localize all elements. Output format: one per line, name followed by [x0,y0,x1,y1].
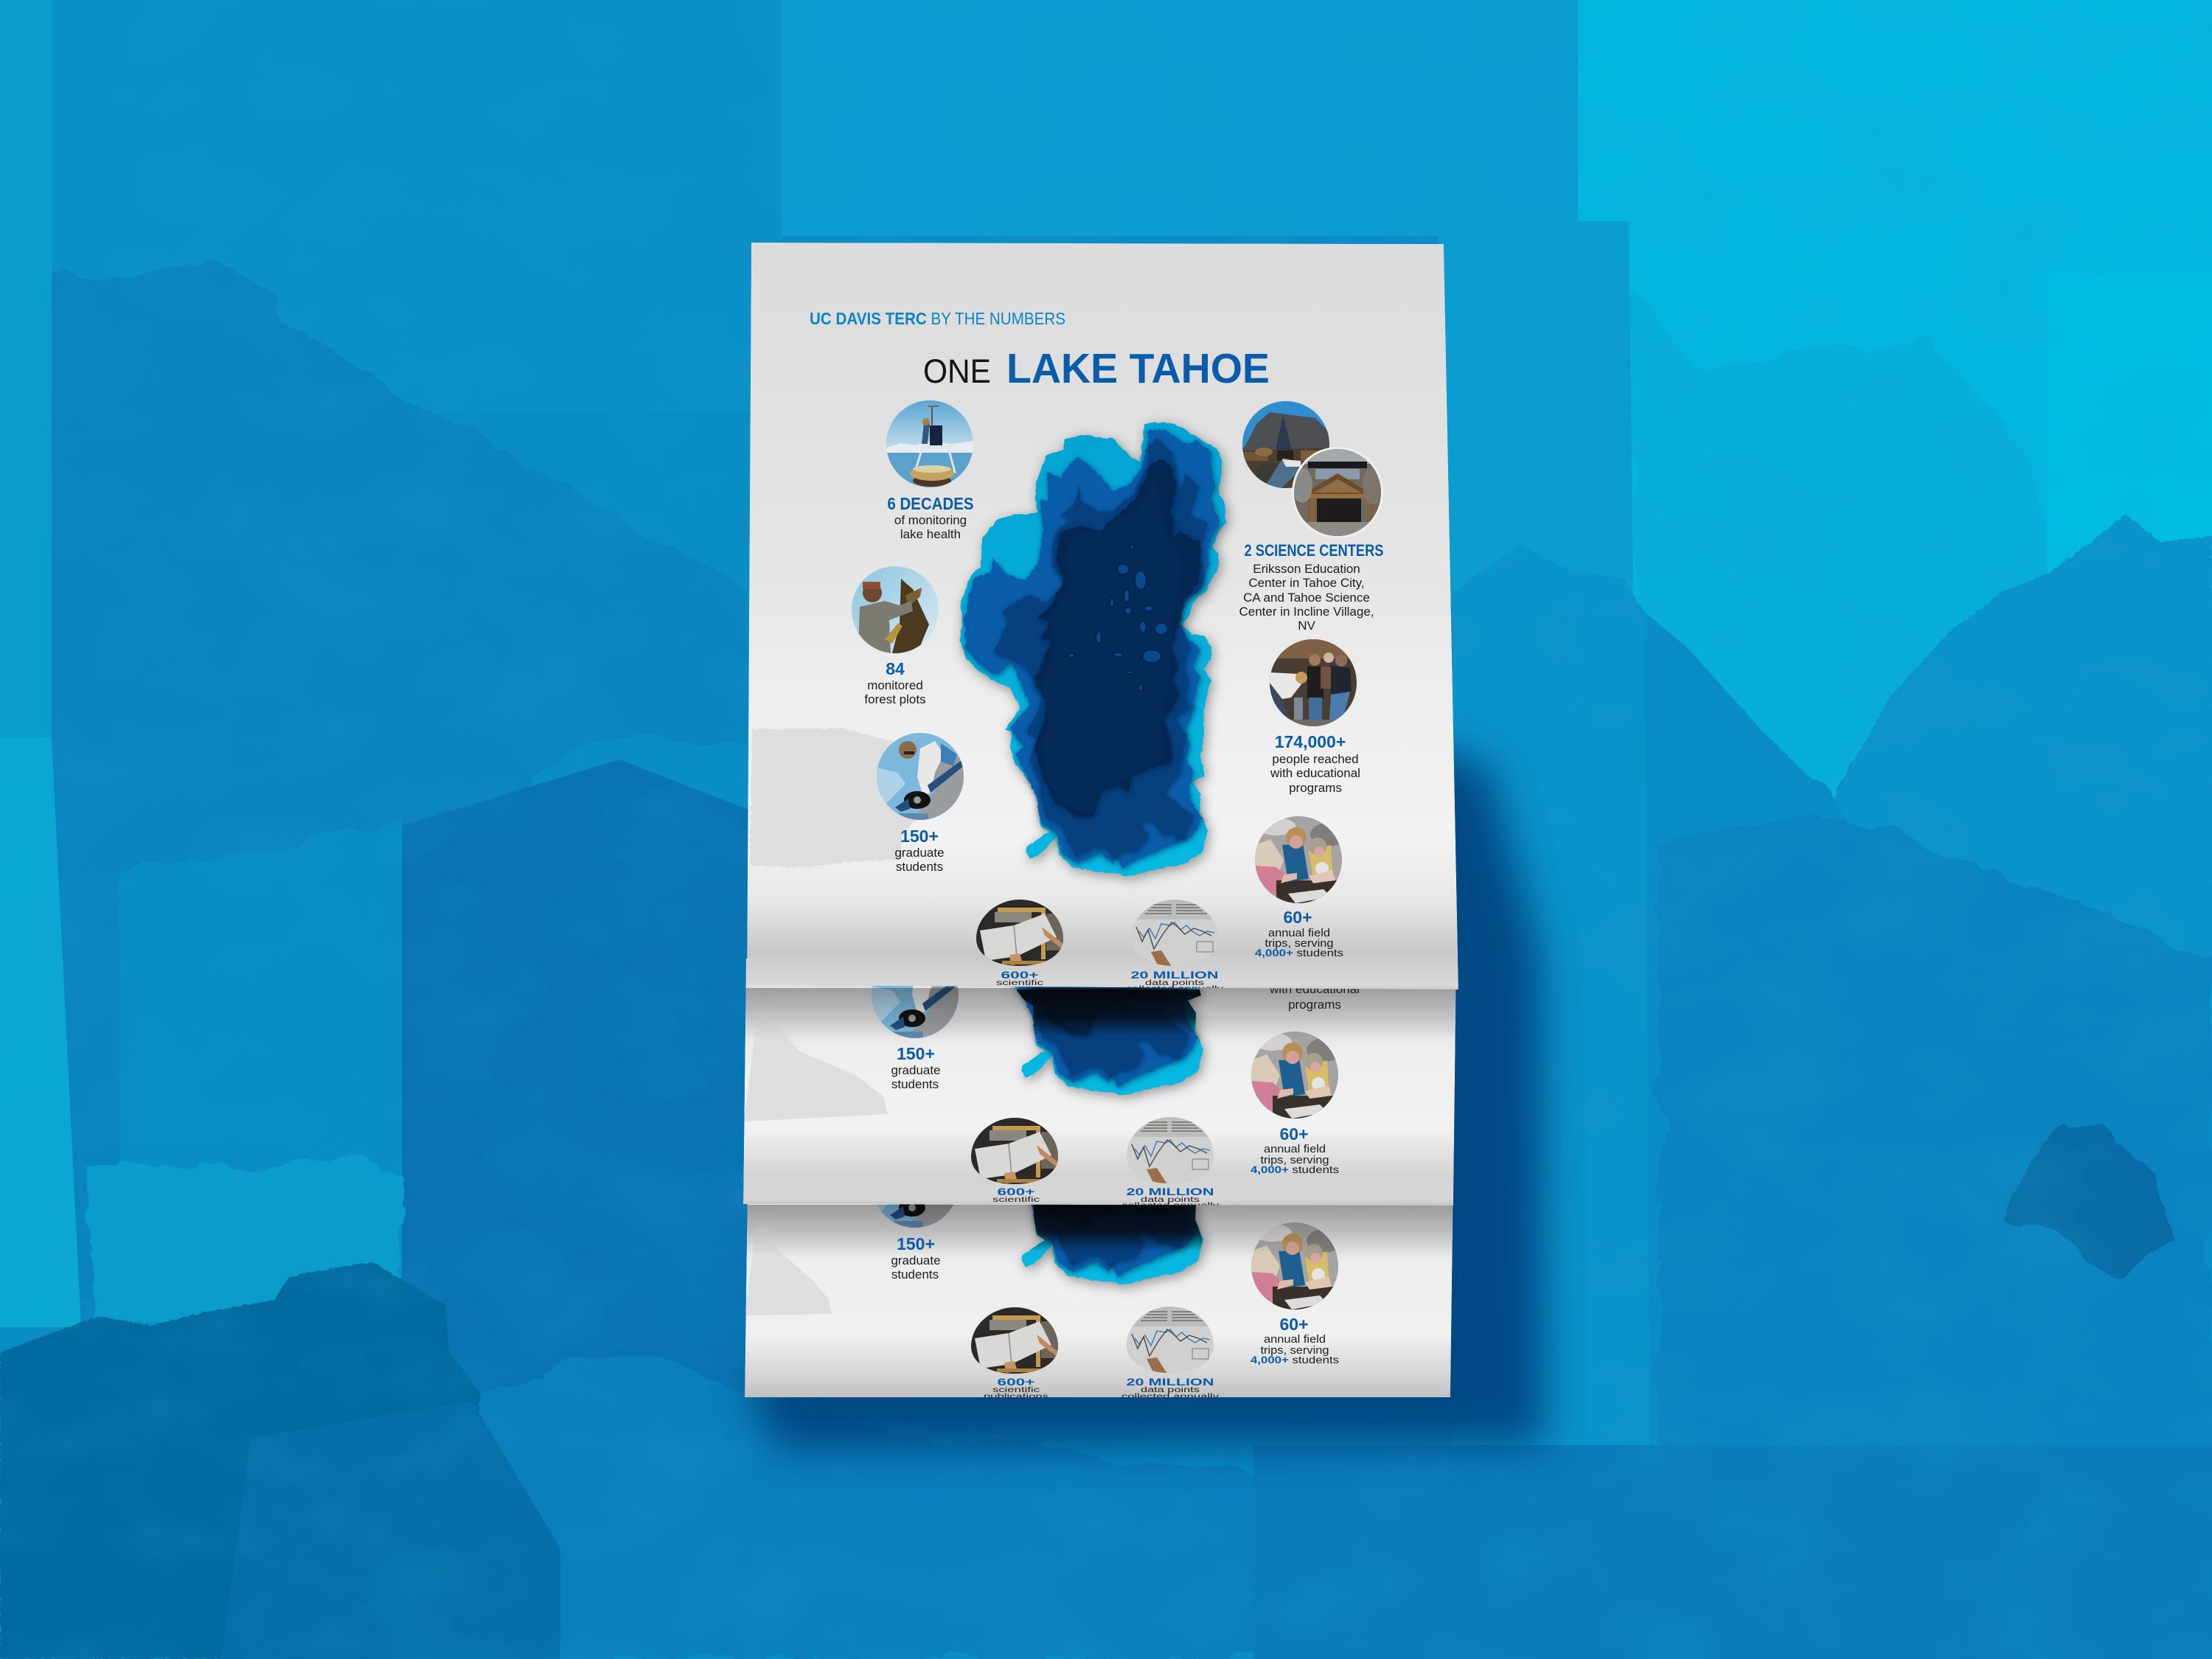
sheet 2 text: educational programs: programs [1288,998,1341,1012]
stat: 600+ publications: scientific [996,979,1043,987]
stat: 6 decades [888,494,973,541]
sheet 3 stat: 60+: trips, serving [1261,1344,1329,1357]
sheet 2 student photo [872,951,959,1039]
sheet 3 stat: 60+: 4,000+ students [1251,1354,1339,1366]
stat: 20 million data points: 20 MILLION [1131,969,1218,981]
stat: 174,000+ people reached: with educational [1270,766,1360,780]
photo: Eriksson Education Center [1242,401,1329,489]
sheet 2 stat: 20 million: 20 MILLION [1127,1186,1214,1197]
sheet 2 kids photo [1251,1032,1343,1119]
sheet 3 stat: 60+: 60+ [1279,1315,1309,1334]
stat: 150+ graduate students: students [896,860,943,874]
photo: scientific publication [975,899,1064,967]
sheet 2 text: educational programs: with educational [1269,982,1360,996]
sheet 3 stat: 150+: 150+ [897,1234,935,1253]
photo: kids on field trip [1255,816,1346,904]
sheet 1: top fold of the poster [747,243,1458,993]
stat: 84 forest plots [864,659,926,706]
sheet 2 stat: 20 million [1121,1186,1219,1210]
stat: 60+ annual field trips: annual field [1268,927,1330,939]
stat: 6 decades: lake health [900,527,961,541]
stat: 174,000+ people reached: 174,000+ [1275,732,1346,751]
sheet 3 book photo [970,1307,1059,1374]
sheet 2 stat: 150+: students [891,1077,939,1091]
sheet 2 stat: 20 million: collected annually [1121,1202,1219,1210]
stat: 60+ annual field trips [1255,908,1343,959]
map: Lake Tahoe bathymetry [960,422,1226,876]
sheet 1 grey page patch [750,728,922,868]
stat: 2 science centers: Eriksson Education [1253,562,1360,576]
sheet 2 stat: 60+: 4,000+ students [1251,1164,1339,1175]
sheet 3 stat: 150+ [891,1238,940,1279]
stat: 2 science centers [1239,541,1383,633]
sheet 2 chart photo [1126,1116,1214,1184]
photo: Tahoe Science Center [1292,447,1383,538]
sheet 2 book photo [970,1117,1059,1185]
stat: 150+ graduate students [894,827,945,874]
sheet 2 text: educational programs [1269,982,1360,1012]
sheet 3: lowest fold of the poster [745,1204,1453,1397]
sheet 2 fold shadow [737,988,1460,1040]
sheet 3 stat: 20 million: data points [1141,1386,1200,1394]
sheet 2 stat: 150+: graduate [891,1063,941,1077]
sheet 2 paper [743,959,1456,1206]
sheet 3 stat: 600+: scientific [992,1386,1040,1394]
stat: 174,000+ people reached [1270,732,1360,795]
stat: 2 science centers: Center in Tahoe City, [1248,576,1365,590]
photo: forest plot researcher [852,566,939,653]
photo: graduate student [877,733,964,821]
sheet 3 stat: 600+: publications [984,1393,1048,1401]
sheet 2 stat: 60+: annual field [1264,1143,1326,1155]
sheet 3 chart photo [1126,1306,1214,1374]
stat: 20 million data points: collected annually [1126,985,1223,993]
stat: 60+ annual field trips: 4,000+ students [1255,947,1343,959]
stat: 6 decades: 6 DECADES [888,494,973,513]
stat: 20 million data points [1126,969,1223,993]
sheet 3 stat: 60+ [1251,1315,1339,1366]
sheet 3 kids photo [1251,1222,1343,1310]
sheet 2 stat: 600+: scientific [992,1196,1040,1204]
stat: 2 science centers: 2 SCIENCE CENTERS [1245,541,1383,560]
stat: 84 forest plots: 84 [886,659,905,678]
stat: 174,000+ people reached: people reached [1272,752,1359,766]
sheet 2 lake fold darkening [954,990,1234,1035]
stat: 20 million data points: data points [1145,979,1204,987]
sheet 2 stat: 150+ [891,1044,941,1091]
photo: visitors group [1270,639,1357,727]
sheet 2 stat: 60+ [1251,1124,1339,1175]
sheet 1 paper [747,243,1458,990]
sheet 2 lake fragment [956,641,1222,1095]
photo: data chart [1130,899,1219,967]
sheet 2 stat: 60+: 60+ [1279,1124,1309,1144]
sheet 2 stat: 150+: 150+ [897,1044,935,1063]
sheet 3 stat: 600+ [984,1376,1048,1401]
stat: 600+ publications [996,969,1043,987]
sheet 2 stat: 600+ [992,1186,1040,1204]
sheet 3 stat: 20 million: collected annually [1121,1393,1219,1401]
sheet 2: middle fold of the poster [737,641,1460,1210]
stat: 2 science centers: Center in Incline Village, [1239,605,1374,619]
stat: 84 forest plots: forest plots [864,692,926,706]
sheet 3 stat: 20 million: 20 MILLION [1127,1376,1214,1388]
sheet 3 stat: 600+: 600+ [997,1376,1035,1388]
sheet 3 stat: 60+: annual field [1264,1333,1326,1346]
sheet 3 paper [745,1204,1453,1397]
sheet 2 stat: 20 million: data points [1141,1196,1200,1204]
sheet 3 fold shadow [747,1205,1453,1249]
title: One Lake Tahoe: LAKE TAHOE [1006,345,1270,392]
sheet 2 stat: 60+: trips, serving [1261,1154,1329,1166]
sheet 3 stat: 150+: students [891,1267,939,1281]
stat: 6 decades: of monitoring [894,513,967,527]
sheet 3 stat: 20 million [1121,1376,1219,1401]
stat: 60+ annual field trips: 60+ [1283,908,1312,927]
sheet 3 student photo [876,1204,954,1228]
sheet 3 lake fragment [1018,1205,1212,1295]
paper stack shadow [745,737,1545,1449]
sheet 3 lake fold darkening [1031,1205,1203,1249]
stat: 174,000+ people reached: programs [1289,781,1342,795]
sheet 2 stat: 600+: 600+ [997,1186,1035,1197]
stat: 150+ graduate students: 150+ [900,827,939,846]
sheet 1 label: UC Davis TERC by the numbers: UC DAVIS TERC BY THE NUMBERS [810,309,1065,328]
stat: 2 science centers: CA and Tahoe Science [1243,591,1370,605]
title: One Lake Tahoe: ONE [923,352,991,390]
stat: 84 forest plots: monitored [867,678,923,692]
sheet 2 grey page patch [744,987,888,1121]
sheet 3 grey page patch [746,1251,832,1315]
stat: 150+ graduate students: graduate [894,846,945,860]
photo: monitoring buoy [886,400,973,487]
stat: 60+ annual field trips: trips, serving [1265,937,1333,950]
stat: 2 science centers: NV [1298,619,1315,633]
sheet 3 stat: 150+: graduate [891,1253,941,1267]
stat: 600+ publications: 600+ [1001,969,1038,981]
